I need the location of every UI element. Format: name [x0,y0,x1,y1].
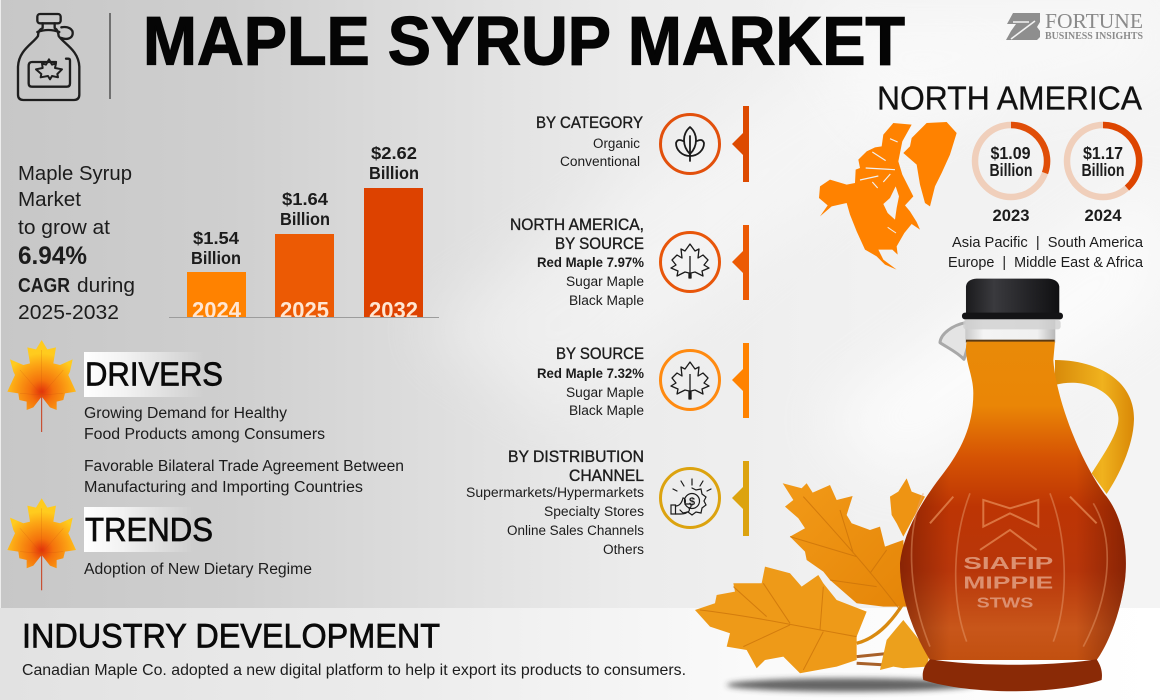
panel: north america by source: Red Maple 7.97% [537,254,645,270]
panel: by category: Organic [593,136,640,152]
donut: 2024: 2024 [1084,207,1122,225]
text block: market growth: during [77,274,135,297]
panel: trends: TRENDS [85,512,213,549]
bottle base [923,659,1102,691]
text block: other regions: Asia Pacific | South America [952,235,1144,251]
panel: industry development [22,618,686,679]
bar chart: Billion [191,248,241,268]
logo: Fortune Business Insights [1006,9,1143,42]
panel: by distribution channel: Supermarkets/Hypermarkets [466,485,644,501]
bar chart [169,143,439,323]
bar chart: 2032 [369,297,418,323]
bar chart: 2025 [280,297,329,323]
bar chart: $1.64 [282,189,328,209]
icon: maple leaf in circle [660,350,720,410]
icon: money badge in circle [660,468,720,528]
icon: syrup bottle [18,14,79,100]
panel: by distribution channel: CHANNEL [569,467,644,485]
panel: drivers: Favorable Bilateral Trade Agreement Between [84,458,404,475]
marker [732,461,749,536]
donut: 2023: 2023 [992,207,1030,225]
title: MAPLE SYRUP MARKET [143,2,905,80]
panel: by source: Black Maple [569,403,644,419]
bottle body [900,342,1126,660]
illustration: maple leaves and syrup bottle [695,279,1134,692]
embossed label: STWS [977,595,1034,611]
bar chart: 2024 [192,297,241,323]
text block: other regions: Europe | Middle East & Africa [948,255,1144,271]
bottle ribs [912,493,1107,647]
panel: by distribution channel: BY DISTRIBUTION [508,448,644,466]
donut: 2023: Billion [990,160,1032,180]
panel: trends [84,507,312,578]
icon: maple leaf (trends) [7,498,76,590]
panel: industry development: INDUSTRY DEVELOPMENT [22,618,440,656]
icon: maple leaf (drivers) [7,340,76,432]
donut: 2024: $1.17 [1083,143,1123,163]
panel: by distribution channel: Others [603,542,644,558]
text block: market growth: to grow at [18,216,110,239]
text block: market growth: 6.94% [18,242,87,270]
text block: market growth: 2025-2032 [18,301,119,324]
panel: by category [536,106,749,182]
panel: drivers: Growing Demand for Healthy [84,405,287,422]
leaves [695,478,930,673]
embossed label: MIPPIE [963,572,1053,592]
text block: market growth: Maple Syrup [18,162,132,185]
shadow [727,678,973,692]
marker [732,343,749,418]
bar chart: Billion [369,163,419,183]
panel: industry development: Canadian Maple Co. adopted a new digital platform to help it export its products to consumers. [22,662,686,679]
text block: market growth [18,162,135,324]
text block: market growth: Market [18,188,81,211]
embossed label: SIAFIP [963,553,1053,573]
text block: other regions [948,235,1144,271]
panel: by category: Conventional [560,154,640,170]
marker [732,106,749,182]
donut: 2023 [975,125,1047,225]
map: north america [819,122,957,270]
donut: 2024: Billion [1082,160,1124,180]
panel: by distribution channel [466,448,749,558]
donut: 2024 [1067,125,1139,225]
panel: drivers: Manufacturing and Importing Countries [84,479,363,496]
text block: market growth: CAGR [18,274,70,297]
panel: by source [537,343,749,419]
handle [1055,360,1134,494]
panel: north america by source: Sugar Maple [566,274,644,290]
panel: drivers [84,352,404,496]
bar chart: Billion [280,209,330,229]
heading: north america: NORTH AMERICA [877,80,1143,118]
icon: money badge in circle: $ [689,496,695,508]
bottle neck [965,320,1055,343]
logo: Fortune Business Insights: BUSINESS INSIGHTS [1045,31,1143,42]
panel: by source: Sugar Maple [566,385,644,401]
donut: 2023: $1.09 [990,143,1031,163]
bar chart: $1.54 [193,228,239,248]
bar chart: $2.62 [371,143,417,163]
panel: drivers: Food Products among Consumers [84,426,325,443]
panel: north america by source [510,216,749,309]
embossed label [963,553,1053,611]
panel: by source: BY SOURCE [556,345,644,363]
bottle spout [940,323,969,359]
panel: north america by source: BY SOURCE [555,235,644,253]
panel: north america by source: Black Maple [569,293,644,309]
divider [109,13,111,99]
panel: trends: Adoption of New Dietary Regime [84,561,312,578]
panel: north america by source: NORTH AMERICA, [510,216,644,234]
panel: by distribution channel: Online Sales Channels [507,523,644,539]
icon: plant in circle [660,114,720,174]
panel: by source: Red Maple 7.32% [537,365,645,381]
panel: drivers: DRIVERS [85,356,223,394]
icon: maple leaf in circle [660,232,720,292]
panel: by distribution channel: Specialty Stores [544,504,644,520]
bottle cap [962,279,1063,319]
logo: Fortune Business Insights: FORTUNE [1045,9,1143,33]
marker [732,225,749,300]
panel: by category: BY CATEGORY [536,114,643,132]
